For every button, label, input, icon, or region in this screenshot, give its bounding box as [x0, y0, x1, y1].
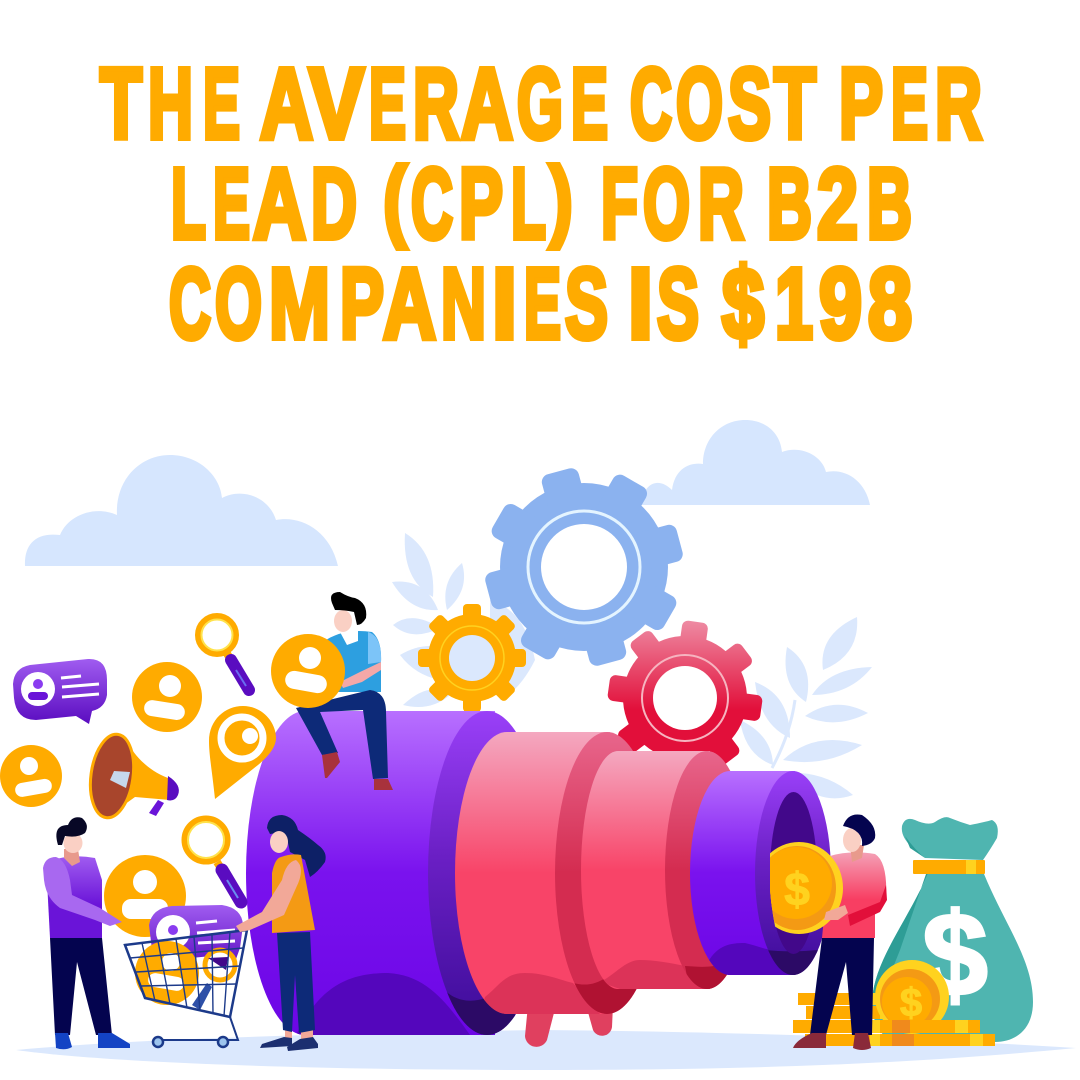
title: S	[728, 48, 771, 160]
title: D	[311, 148, 357, 260]
title: C	[411, 148, 453, 260]
title: 9	[819, 248, 862, 360]
title: T	[100, 48, 142, 160]
title: H	[148, 48, 193, 160]
icon: money bag	[872, 817, 1033, 1042]
plant: right leaves	[740, 617, 872, 798]
icon: money bag: $	[922, 889, 988, 1021]
icon: location pin	[209, 706, 276, 799]
title: N	[441, 248, 486, 360]
title: O	[676, 48, 723, 160]
title: P	[459, 148, 503, 260]
title: C	[630, 48, 672, 160]
title: R	[935, 48, 982, 160]
title: E	[369, 48, 406, 160]
title: B	[767, 148, 812, 260]
icon: coin on stack	[875, 960, 949, 1034]
title: S	[657, 248, 699, 360]
title: O	[643, 148, 690, 260]
plant: left leaves	[392, 533, 535, 707]
cloud: right	[640, 420, 870, 505]
title: 1	[775, 248, 813, 360]
shopping cart	[125, 905, 247, 1047]
title: 2	[817, 148, 858, 260]
title: S	[565, 248, 608, 360]
person: woman	[236, 815, 326, 1051]
funnel	[246, 711, 831, 1040]
title: )	[549, 150, 573, 250]
title: L	[511, 148, 546, 260]
title: I	[628, 248, 653, 360]
title: E	[203, 48, 240, 160]
title: G	[517, 48, 563, 160]
person: man with coin	[793, 814, 887, 1050]
icon: person badge top	[132, 662, 202, 732]
icon: coin held by man	[770, 842, 848, 934]
title: $	[722, 248, 764, 360]
icon: chat bubble	[13, 659, 107, 724]
title	[100, 48, 982, 360]
title: R	[413, 48, 459, 160]
icon: coin on stack: $	[900, 981, 922, 1025]
title: R	[698, 148, 744, 260]
gear: orange	[418, 604, 526, 714]
title: A	[253, 148, 306, 260]
gear: red	[608, 620, 762, 764]
title: A	[461, 48, 513, 160]
icon: magnifier lower	[184, 818, 241, 902]
funnel legs	[525, 1005, 613, 1047]
title: P	[340, 248, 384, 360]
icon: person badge held by seated man	[271, 634, 345, 708]
title: M	[269, 248, 330, 360]
title: C	[169, 248, 211, 360]
title: T	[774, 48, 816, 160]
title: F	[601, 148, 638, 260]
icon: magnifier top	[198, 616, 249, 690]
person: seated man	[296, 592, 393, 790]
title: O	[215, 248, 262, 360]
gear: blue	[483, 466, 685, 668]
icon: megaphone	[85, 731, 179, 821]
title: I	[492, 248, 517, 360]
icon: coin held by man: $	[784, 863, 810, 915]
funnel section: large purple	[246, 711, 516, 1035]
title: E	[891, 48, 928, 160]
coin stack: upper	[798, 993, 891, 1019]
title: B	[867, 148, 912, 260]
title: 8	[868, 248, 912, 360]
funnel section: purple mouth	[690, 771, 831, 980]
title: A	[260, 48, 313, 160]
funnel section: large pink	[455, 732, 636, 1014]
title: E	[213, 148, 250, 260]
ground shadow	[16, 1030, 1076, 1070]
title: L	[171, 148, 206, 260]
icon: person badge by man	[104, 855, 186, 937]
title: V	[309, 48, 364, 160]
title: P	[839, 48, 883, 160]
funnel section: small pink	[581, 751, 730, 989]
title: (	[383, 150, 407, 250]
title: A	[383, 248, 436, 360]
icon: person badge left	[0, 745, 62, 807]
title: E	[524, 248, 561, 360]
person: man with purple shirt	[43, 817, 130, 1049]
title: E	[571, 48, 608, 160]
coin stack: lower	[793, 1020, 995, 1046]
cloud: left	[25, 455, 338, 566]
